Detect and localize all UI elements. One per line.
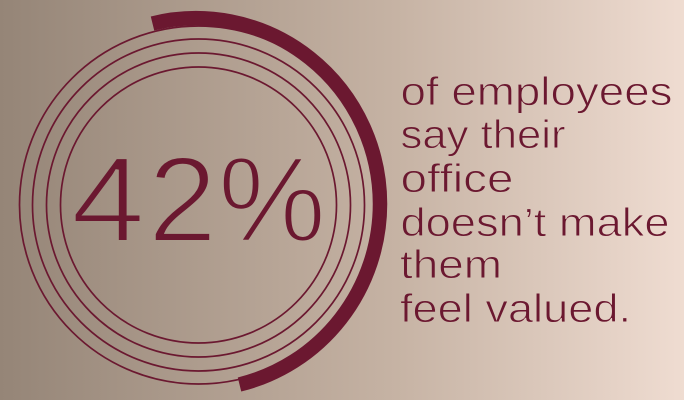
statistic: 42%: % [218, 132, 326, 268]
description text: say their [400, 113, 566, 157]
statistic: 42%: 4 [71, 132, 145, 268]
description text: doesn’t make [400, 201, 670, 245]
description text: them [400, 243, 502, 287]
description text: of employees [400, 70, 672, 114]
description text: feel valued. [400, 287, 631, 331]
statistic: 42% [71, 132, 326, 268]
thick progress arc [152, 18, 380, 384]
description text: office [400, 157, 514, 201]
description text [400, 70, 672, 331]
statistic: 42%: 2 [148, 132, 217, 268]
concentric ring gauge [20, 18, 380, 384]
